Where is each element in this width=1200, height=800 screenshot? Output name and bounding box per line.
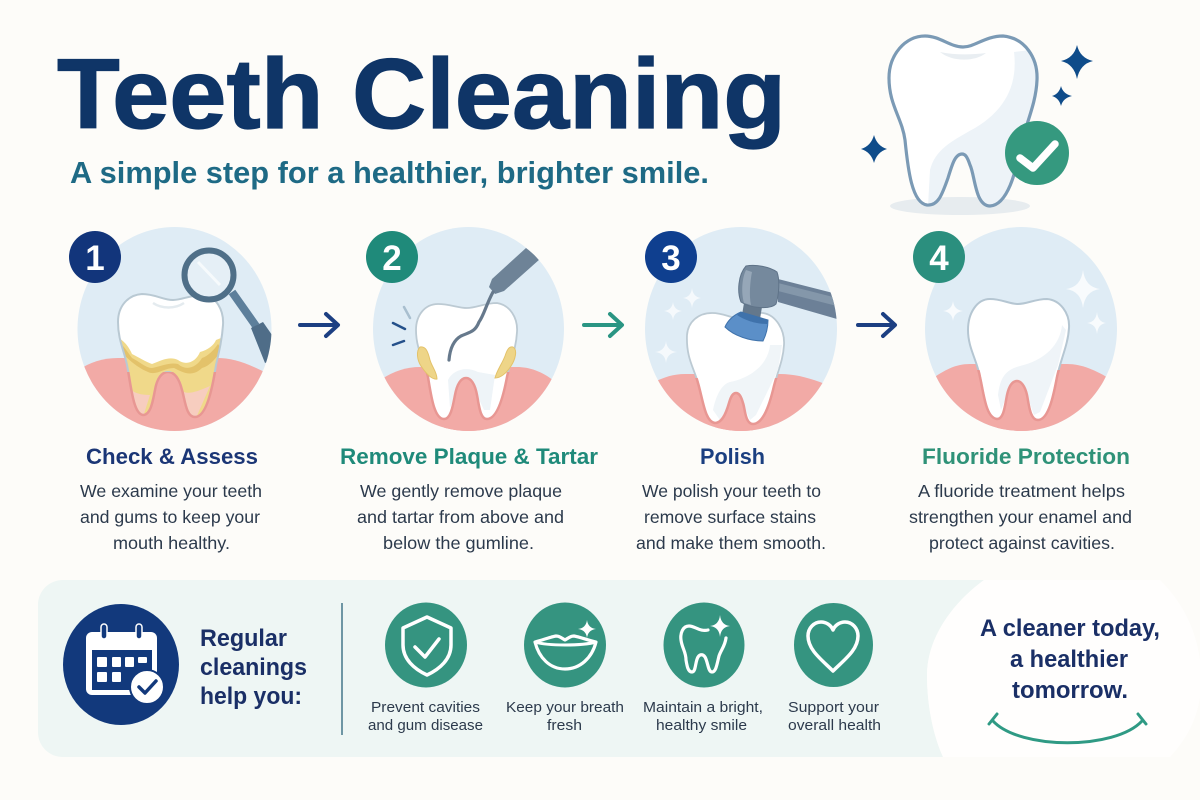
step 1 text: mouth healthy. [113,533,230,553]
tooth [968,299,1069,420]
step 1 text: We examine your teeth [80,481,262,501]
step 1 text: Check & Assess [86,444,258,469]
step 2 text: below the gumline. [383,533,534,553]
step 2: remove plaque and tartar illustration [373,227,564,440]
benefits heading: Regular [200,625,287,652]
step 2 text: We gently remove plaque [360,481,562,501]
step 4 text: protect against cavities. [929,533,1115,553]
panel: benefits band [38,580,984,757]
closing message [980,615,1160,704]
closing message: a healthier [1010,646,1128,673]
step 2 text: Remove Plaque & Tartar [340,444,598,469]
title: Teeth Cleaning [57,38,786,149]
step 4: fluoride protection illustration [925,227,1117,440]
benefit: bright smile: healthy smile [656,718,747,734]
arrow: step 3 to 4 [858,314,895,336]
subtitle: A simple step for a healthier, brighter smile. [70,155,709,190]
badge: step number 1 [69,231,121,283]
benefit: fresh breath [506,602,624,734]
step 3 text [636,444,826,553]
polisher handpiece [725,265,837,341]
gums [658,374,822,431]
benefit: bright smile [643,602,763,734]
benefits heading: help you: [200,683,302,710]
step 4 text: Fluoride Protection [922,444,1130,469]
benefit: bright smile: Maintain a bright, [643,700,763,716]
benefit: fresh breath: fresh [547,718,582,734]
closing message: A cleaner today, [980,615,1160,642]
step 3 text: and make them smooth. [636,533,826,553]
plaque buildup [121,338,220,416]
badge: step number 2: 2 [382,239,402,278]
benefit: prevent cavities [368,602,483,734]
arrow: step 1 to 2 [300,314,338,336]
badge: step number 3: 3 [661,239,681,278]
benefits heading [200,625,307,710]
tooth [416,303,517,419]
icon: hero tooth with check and sparkles [861,36,1093,215]
badge: step number 4 [913,231,965,283]
benefit: prevent cavities: and gum disease [368,718,483,734]
closing message: tomorrow. [1012,677,1128,704]
cleaning sparks [393,307,410,345]
benefits heading: cleanings [200,654,307,681]
badge: step number 4: 4 [929,239,949,278]
step 4 text: A fluoride treatment helps [918,481,1125,501]
tooth [687,313,784,424]
step 3 text: Polish [700,444,765,469]
benefit: overall health: Support your [788,700,879,716]
step 3 text: We polish your teeth to [642,481,821,501]
sparkles [943,270,1106,334]
badge: step number 3 [645,231,697,283]
step 1 text [80,444,262,553]
icon: smile curve [989,714,1146,743]
gums [384,367,552,431]
step 4 text: strengthen your enamel and [909,507,1132,527]
badge: step number 1: 1 [85,239,105,278]
tartar deposits [417,347,437,379]
arrow: step 2 to 3 [584,314,622,336]
gum between roots [444,378,487,431]
step 1: check and assess illustration [78,227,272,431]
benefit: overall health [788,603,881,734]
gums [936,364,1106,431]
benefit: prevent cavities: Prevent cavities [371,700,480,716]
dental mirror [232,292,272,363]
step 3: polish illustration [645,227,837,440]
gums [84,358,263,431]
sparkles [655,288,701,363]
step 1 text: and gums to keep your [80,507,260,527]
panel: closing message background [927,580,1200,757]
step 2 text [340,444,598,553]
benefit: overall health: overall health [788,718,881,734]
step 2 text: and tartar from above and [357,507,564,527]
tooth [118,294,223,417]
badge: step number 2 [366,231,418,283]
step 3 text: remove surface stains [644,507,816,527]
icon: calendar with check [63,604,179,725]
benefit: fresh breath: Keep your breath [506,700,624,716]
scaler tool [449,248,540,360]
step 4 text [909,444,1132,553]
